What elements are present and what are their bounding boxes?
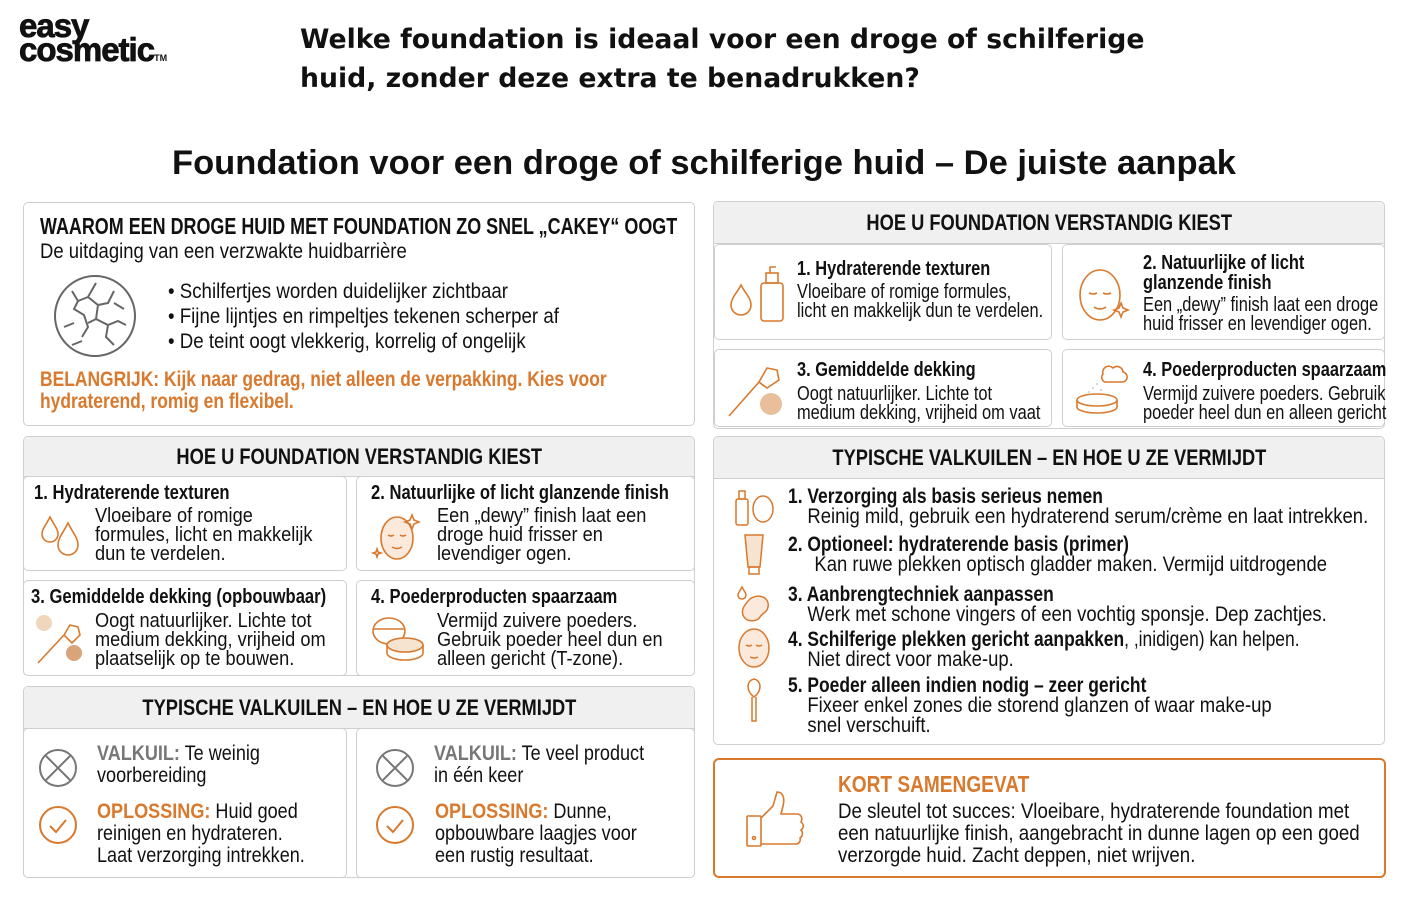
card: powder sparingly: Vermijd zuivere poeders. bbox=[437, 610, 637, 632]
card: natural finish right: Een „dewy” finish laat een droge bbox=[1143, 294, 1378, 316]
icon: cracked skin bbox=[54, 275, 136, 357]
icon: cross bbox=[39, 749, 77, 787]
step 1: Reinig mild, gebruik een hydraterend serum/crème en laat intrekken. bbox=[807, 505, 1368, 528]
card: natural finish: levendiger ogen. bbox=[437, 543, 572, 565]
card: powder right: 4. Poederproducten spaarzaam bbox=[1143, 359, 1386, 381]
icon: bottle and face bbox=[735, 490, 774, 526]
icon: sponge bbox=[737, 586, 769, 622]
card: hydrating textures right: Vloeibare of romige formules, bbox=[797, 281, 1011, 303]
card: powder sparingly: Gebruik poeder heel dun en bbox=[437, 629, 663, 651]
step 2 bbox=[788, 533, 1327, 576]
icon: face bbox=[371, 513, 421, 560]
card: pitfall 1: VALKUIL: Te weinig bbox=[97, 742, 260, 765]
step 5 bbox=[788, 674, 1272, 737]
heading: TYPISCHE VALKUILEN – EN HOE U ZE VERMIJDT bbox=[832, 445, 1266, 470]
heading: KORT SAMENGEVAT bbox=[838, 771, 1029, 797]
card: pitfall 1: OPLOSSING: Huid goed bbox=[97, 800, 298, 823]
question heading: huid, zonder deze extra te benadrukken? bbox=[300, 63, 920, 94]
bullet list: • De teint oogt vlekkerig, korrelig of ongelijk bbox=[168, 330, 526, 353]
card: hydrating textures: 1. Hydraterende texturen bbox=[34, 482, 230, 504]
card: natural finish right: huid frisser en levendiger ogen. bbox=[1143, 313, 1372, 335]
card: hydrating textures: dun te verdelen. bbox=[95, 543, 226, 565]
heading: HOE U FOUNDATION VERSTANDIG KIEST bbox=[866, 210, 1232, 235]
card: medium coverage: Oogt natuurlijker. Lichte tot bbox=[95, 610, 312, 632]
card: pitfall 2: OPLOSSING: Dunne, bbox=[435, 800, 612, 823]
card: powder sparingly: 4. Poederproducten spaarzaam bbox=[371, 586, 617, 608]
card: pitfall 1: Laat verzorging intrekken. bbox=[97, 844, 305, 867]
card: natural finish right bbox=[1062, 244, 1385, 340]
card: medium coverage right: medium dekking, vrijheid om vaat bbox=[797, 402, 1040, 424]
card: natural finish bbox=[356, 476, 695, 571]
icon: face bbox=[738, 628, 770, 668]
step 3: 3. Aanbrengtechniek aanpassen bbox=[788, 583, 1054, 606]
main title: Foundation voor een droge of schilferige huid – De juiste aanpak bbox=[172, 144, 1236, 182]
step 5: snel verschuift. bbox=[807, 714, 931, 737]
card: natural finish: 2. Natuurlijke of licht glanzende finish bbox=[371, 482, 669, 504]
body text: een natuurlijke finish, aangebracht in dunne lagen op een goed bbox=[838, 822, 1360, 845]
icon: brush bbox=[728, 367, 782, 416]
icon: cross bbox=[376, 749, 414, 787]
step 1 bbox=[788, 485, 1368, 528]
card: natural finish right: 2. Natuurlijke of licht bbox=[1143, 252, 1304, 274]
body text: De sleutel tot succes: Vloeibare, hydraterende foundation met bbox=[838, 800, 1349, 823]
step 5: Fixeer enkel zones die storend glanzen of waar make-up bbox=[807, 694, 1272, 717]
card: powder right bbox=[1062, 349, 1385, 427]
logo: cosmeticTM bbox=[19, 31, 167, 68]
card: natural finish: droge huid frisser en bbox=[437, 524, 603, 546]
heading bbox=[714, 202, 1384, 244]
icon: brush bbox=[36, 615, 82, 664]
card: pitfall 2: in één keer bbox=[434, 764, 523, 787]
step 4: 4. Schilferige plekken gericht aanpakken, ,inidigen) kan helpen. bbox=[788, 628, 1300, 651]
card: hydrating textures bbox=[23, 476, 347, 571]
body text bbox=[838, 800, 1360, 867]
icon: powder bbox=[1076, 365, 1128, 414]
subheading: De uitdaging van een verzwakte huidbarrière bbox=[40, 240, 407, 263]
card: hydrating textures right: 1. Hydraterende texturen bbox=[797, 258, 990, 280]
icon: powder brush bbox=[747, 678, 761, 722]
heading: WAAROM EEN DROGE HUID MET FOUNDATION ZO SNEL „CAKEY“ OOGT bbox=[40, 213, 677, 239]
card: medium coverage: plaatselijk op te bouwen. bbox=[95, 648, 294, 670]
card: natural finish right: glanzende finish bbox=[1143, 272, 1271, 294]
icon: primer tube bbox=[744, 534, 764, 575]
card: natural finish: Een „dewy” finish laat een bbox=[437, 505, 646, 527]
card: medium coverage right: 3. Gemiddelde dekking bbox=[797, 359, 976, 381]
card: hydrating textures right: licht en makkelijk dun te verdelen. bbox=[797, 300, 1043, 322]
card: pitfall 2: een rustig resultaat. bbox=[435, 844, 594, 867]
panel: summary bbox=[713, 758, 1386, 878]
card: medium coverage right bbox=[714, 349, 1052, 427]
icon: drops bbox=[41, 515, 79, 556]
step 5: 5. Poeder alleen indien nodig – zeer gericht bbox=[788, 674, 1146, 697]
important note: hydraterend, romig en flexibel. bbox=[40, 390, 294, 413]
icon: face sparkle bbox=[1079, 269, 1130, 321]
icon: check bbox=[376, 806, 414, 844]
card: hydrating textures: formules, licht en makkelijk bbox=[95, 524, 312, 546]
heading bbox=[24, 687, 694, 729]
step 1: 1. Verzorging als basis serieus nemen bbox=[788, 485, 1103, 508]
card: medium coverage: medium dekking, vrijheid om bbox=[95, 629, 326, 651]
heading bbox=[714, 437, 1384, 479]
heading: HOE U FOUNDATION VERSTANDIG KIEST bbox=[176, 444, 542, 469]
icon: thumbs up bbox=[746, 791, 804, 847]
step 2: Kan ruwe plekken optisch gladder maken. Vermijd uitdrogende bbox=[814, 553, 1327, 576]
panel: why cakey bbox=[23, 202, 695, 426]
card: pitfall 2: opbouwbare laagjes voor bbox=[435, 822, 637, 845]
card: powder right: poeder heel dun en alleen gericht bbox=[1143, 402, 1386, 424]
panel: pitfalls (left) bbox=[23, 686, 695, 878]
card: pitfall 1: reinigen en hydrateren. bbox=[97, 822, 283, 845]
card: pitfall 1 bbox=[23, 728, 347, 878]
icon: drop and bottle bbox=[730, 266, 784, 322]
icon: powder compact bbox=[372, 617, 424, 661]
card: pitfall 2: VALKUIL: Te veel product bbox=[434, 742, 644, 765]
panel: choose wisely (right) bbox=[713, 201, 1385, 429]
panel: pitfalls (right) bbox=[713, 436, 1385, 745]
bullet list: • Fijne lijntjes en rimpeltjes tekenen scherper af bbox=[168, 305, 559, 328]
step 2: 2. Optioneel: hydraterende basis (primer) bbox=[788, 533, 1129, 556]
question heading bbox=[300, 24, 1144, 94]
question heading: Welke foundation is ideaal voor een droge of schilferige bbox=[300, 24, 1144, 55]
icon: check bbox=[39, 806, 77, 844]
heading: TYPISCHE VALKUILEN – EN HOE U ZE VERMIJDT bbox=[142, 695, 576, 720]
card: medium coverage right: Oogt natuurlijker. Lichte tot bbox=[797, 383, 992, 405]
body text: verzorgde huid. Zacht deppen, niet wrijven. bbox=[838, 844, 1195, 867]
card: powder sparingly bbox=[356, 580, 695, 676]
important note: BELANGRIJK: Kijk naar gedrag, niet alleen de verpakking. Kies voor bbox=[40, 368, 607, 391]
bullet list: • Schilfertjes worden duidelijker zichtbaar bbox=[168, 280, 508, 303]
card: hydrating textures: Vloeibare of romige bbox=[95, 505, 253, 527]
card: powder sparingly: alleen gericht (T-zone). bbox=[437, 648, 623, 670]
bullet list bbox=[168, 280, 559, 353]
step 3 bbox=[788, 583, 1327, 626]
card: pitfall 1: voorbereiding bbox=[97, 764, 206, 787]
step 3: Werk met schone vingers of een vochtig sponsje. Dep zachtjes. bbox=[807, 603, 1327, 626]
heading bbox=[24, 437, 694, 477]
card: hydrating textures right bbox=[714, 244, 1052, 340]
card: powder right: Vermijd zuivere poeders. Gebruik bbox=[1143, 383, 1385, 405]
important note bbox=[40, 368, 607, 413]
logo bbox=[19, 7, 167, 68]
logo: easy bbox=[19, 7, 88, 44]
step 4: Niet direct voor make-up. bbox=[807, 648, 1014, 671]
card: medium coverage: 3. Gemiddelde dekking (opbouwbaar) bbox=[31, 586, 326, 608]
step 4 bbox=[788, 628, 1300, 671]
card: pitfall 2 bbox=[356, 728, 695, 878]
panel: choose wisely (left) bbox=[23, 436, 695, 676]
card: medium coverage bbox=[23, 580, 347, 676]
